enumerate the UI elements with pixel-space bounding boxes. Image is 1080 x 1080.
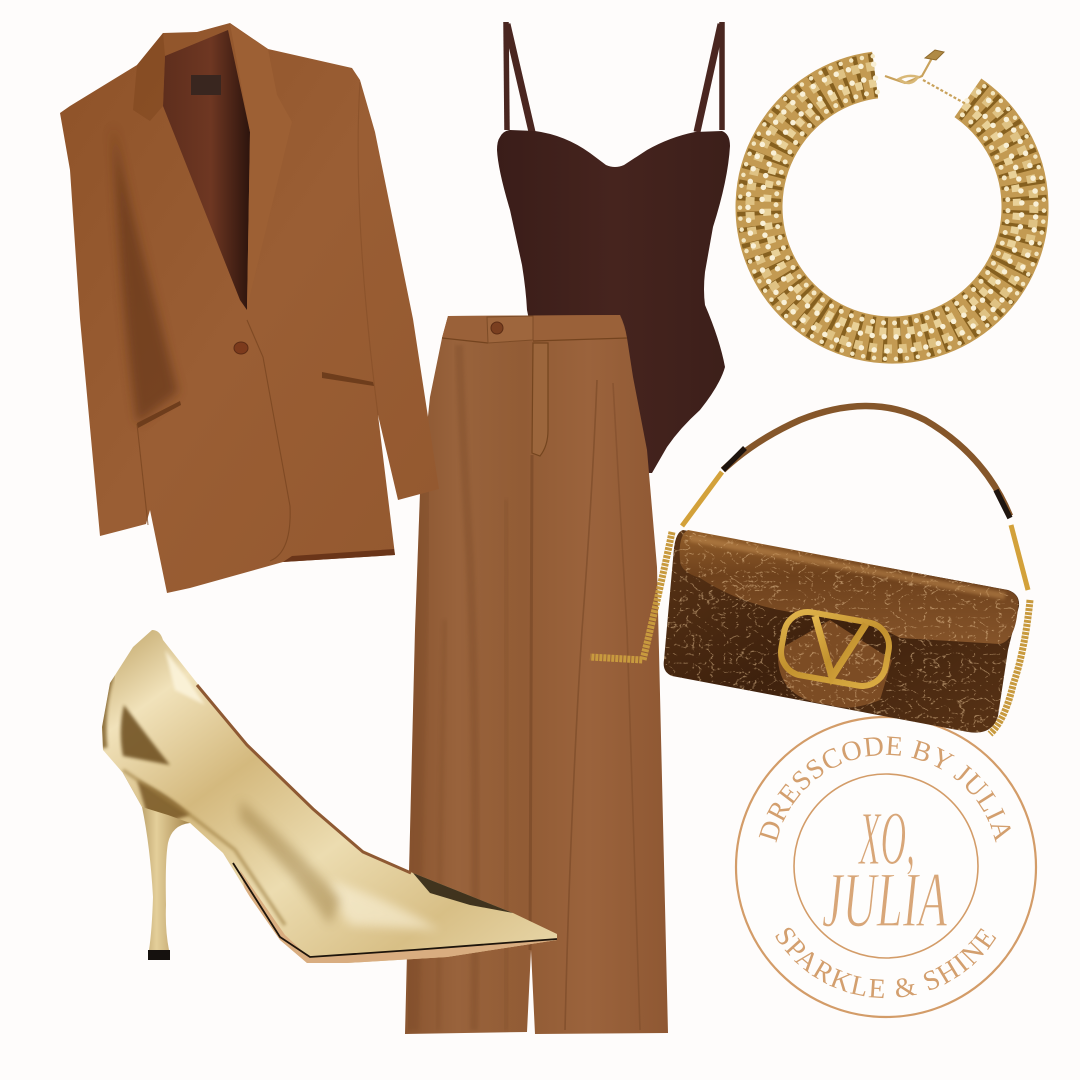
- brand stamp: Dresscode by Julia: XO,: [858, 797, 915, 881]
- bag right chain: [990, 600, 1030, 734]
- stamp outer ring: [736, 717, 1036, 1017]
- bag top highlight: [690, 538, 1005, 596]
- trousers: [405, 315, 668, 1034]
- blazer right pocket: [322, 372, 374, 386]
- gold pump: [102, 630, 560, 968]
- blazer right lapel: [230, 24, 292, 308]
- blazer seams: [137, 82, 378, 561]
- V logo ring: [777, 608, 893, 690]
- trousers fly: [532, 343, 548, 456]
- bag flap: [680, 530, 1018, 644]
- necklace chain band: [759, 75, 1025, 340]
- bag body: [664, 530, 1019, 733]
- stamp top text: DRESSCODE BY JULIA: [758, 736, 1011, 842]
- bag crackle texture: [660, 525, 1025, 740]
- bodysuit straps: [506, 22, 722, 132]
- blazer lining: [163, 30, 250, 310]
- pump reflections: [103, 650, 560, 968]
- blazer left sleeve shadow: [113, 125, 178, 424]
- blazer label tag: [191, 75, 221, 95]
- handbag: [590, 406, 1030, 740]
- bag right clasp: [1011, 525, 1028, 590]
- blazer left lapel: [133, 33, 165, 121]
- necklace: [740, 50, 1044, 359]
- V logo letter: [815, 616, 866, 677]
- pump lining stripe: [197, 685, 411, 873]
- bag left chain: [590, 532, 672, 660]
- brand stamp: Dresscode by Julia: [734, 716, 1038, 1018]
- bag left clasp: [682, 472, 722, 526]
- necklace clasp and extender chain: [885, 58, 932, 83]
- trousers button: [491, 322, 503, 334]
- blazer main shape: [60, 23, 439, 593]
- bag logo tab: [778, 620, 892, 708]
- trousers main shape: [405, 315, 668, 1034]
- pump heel: [123, 773, 190, 950]
- blazer left pocket: [137, 401, 181, 428]
- necklace charm: [925, 50, 944, 60]
- trousers folds and shadows: [412, 345, 640, 1030]
- V logo: [777, 608, 893, 690]
- pump toe shadow: [413, 873, 513, 913]
- pump body: [102, 630, 557, 963]
- trousers waistband: [442, 315, 627, 343]
- trousers waist tab: [487, 316, 533, 343]
- blazer: [60, 23, 439, 593]
- blazer button: [234, 342, 248, 354]
- blazer lower hem lining: [283, 549, 395, 562]
- bag handle: [723, 406, 1010, 516]
- bodysuit: [497, 22, 730, 473]
- stamp bottom text: SPARKLE & SHINE: [775, 928, 996, 998]
- stamp inner ring: [794, 774, 978, 958]
- script signature Julia: JULIA: [822, 856, 947, 943]
- pump heel tip: [148, 950, 170, 960]
- pump sole line: [233, 863, 557, 957]
- bodysuit body: [497, 130, 730, 473]
